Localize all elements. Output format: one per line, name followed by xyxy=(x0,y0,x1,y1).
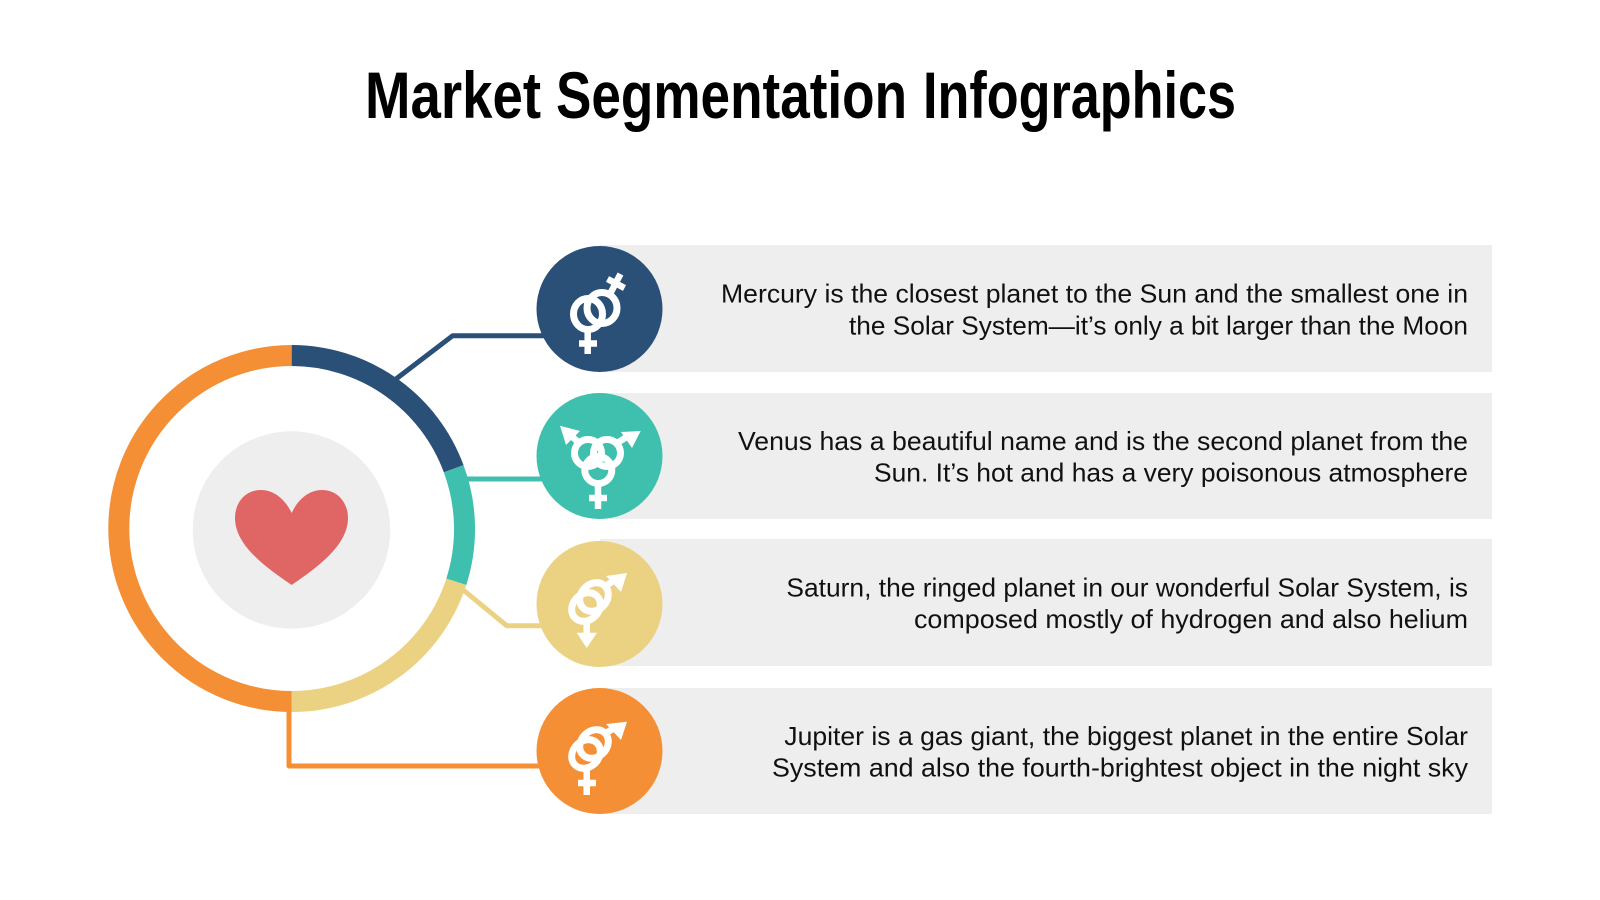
icon circle: orange xyxy=(536,688,662,814)
text block: Sun. It’s hot and has a very poisonous atmosphere xyxy=(874,458,1468,488)
connector lines xyxy=(289,336,545,766)
icon circle: navy xyxy=(536,246,662,372)
title: Segmentation xyxy=(556,58,907,132)
ring segment: teal xyxy=(454,469,465,582)
text block: Venus has a beautiful name and is the second planet from the xyxy=(738,426,1468,456)
icon: male and female symbols xyxy=(566,722,627,795)
panel background xyxy=(600,393,1492,519)
center circle xyxy=(193,431,390,629)
center heart badge xyxy=(193,431,390,629)
title xyxy=(365,58,1236,132)
title: Infographics xyxy=(923,58,1236,132)
row 1: Mercury xyxy=(536,245,1492,372)
text block: the Solar System—it’s only a bit larger than the Moon xyxy=(849,310,1468,340)
icon: female and female symbols xyxy=(574,274,624,354)
icon: two male symbols xyxy=(566,573,627,648)
text block: Mercury is the closest planet to the Sun and the smallest one in xyxy=(721,278,1468,308)
icon circle: teal xyxy=(536,393,662,519)
row 4: Jupiter xyxy=(536,688,1492,814)
icon: heart xyxy=(235,490,348,585)
ring segment: yellow xyxy=(292,582,456,702)
donut ring chart xyxy=(119,356,465,702)
ring segment: orange xyxy=(119,356,292,702)
text block: Jupiter is a gas giant, the biggest planet in the entire Solar xyxy=(784,721,1468,751)
text block: composed mostly of hydrogen and also helium xyxy=(914,604,1468,634)
panel background xyxy=(600,688,1492,814)
panel background xyxy=(600,539,1492,666)
ring segment: navy xyxy=(292,356,454,469)
panel background xyxy=(600,245,1492,372)
icon circle: yellow xyxy=(536,541,662,667)
icon: three intertwined symbols xyxy=(560,426,641,509)
text block: System and also the fourth-brightest object in the night sky xyxy=(772,752,1468,782)
text block: Saturn, the ringed planet in our wonderful Solar System, is xyxy=(786,572,1468,602)
row 2: Venus xyxy=(536,393,1492,519)
title: Market xyxy=(365,58,541,132)
row 3: Saturn xyxy=(536,539,1492,667)
